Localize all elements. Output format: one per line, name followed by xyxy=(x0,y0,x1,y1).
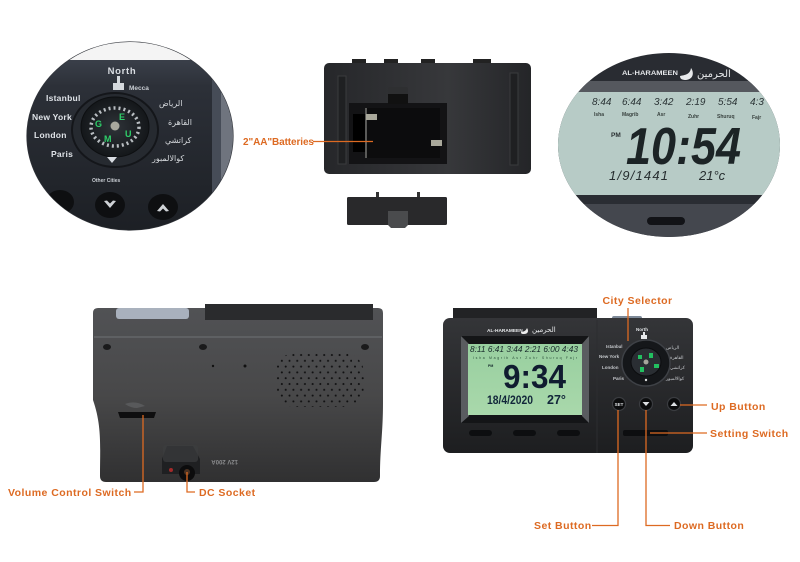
LCD screen xyxy=(550,92,790,195)
text: city labels: Other Cities xyxy=(92,178,121,184)
text: prayer times: 4:3 xyxy=(750,97,764,108)
text: prayer times: Shuruq xyxy=(717,114,734,120)
compass and city labels: Istanbul xyxy=(606,344,622,349)
speaker grille xyxy=(275,353,364,407)
battery recess xyxy=(349,87,447,164)
panel: LCD close-up circle xyxy=(558,53,780,237)
text: city labels: Istanbul xyxy=(46,93,81,103)
up button xyxy=(668,398,680,410)
text: prayer times: Asr xyxy=(657,112,665,118)
text: brand xyxy=(487,326,556,334)
LCD screen: 8:11 6:41 3:44 2:21 6:00 4:43 xyxy=(470,344,578,354)
text: prayer times xyxy=(592,97,764,121)
compass and city labels: Paris xyxy=(613,376,625,381)
text: city labels: New York xyxy=(32,112,72,122)
callout: volume control switch: Volume Control Switch xyxy=(8,487,132,499)
icon: down button xyxy=(95,192,125,218)
LCD screen: Isha Magrib Asr Zuhr Shuruq Fajr xyxy=(473,356,578,360)
LCD bezel xyxy=(461,336,589,423)
icon: compass dial: U xyxy=(125,129,132,139)
DC socket housing: 12V 200A xyxy=(211,458,238,464)
callout: setting switch: Setting Switch xyxy=(710,428,789,440)
icon: up button xyxy=(148,194,178,220)
callout: setting switch xyxy=(650,428,789,440)
text: prayer times: Magrib xyxy=(622,112,638,118)
volume control slot xyxy=(118,402,156,418)
compass and city labels: North xyxy=(636,327,648,332)
panel: clock front view xyxy=(443,295,789,532)
text: prayer times: 6:44 xyxy=(622,97,642,108)
compass and city labels: كوالالمبور xyxy=(665,376,685,381)
text: brand xyxy=(622,68,731,80)
text: main time: 9:34 xyxy=(503,358,567,395)
callout: batteries: 2"AA"Batteries xyxy=(243,137,314,148)
callout: down button: Down Button xyxy=(674,520,744,532)
icon: compass dial: M xyxy=(104,134,112,144)
compass and city labels: London xyxy=(602,365,619,370)
panel: clock rear view xyxy=(8,304,383,499)
text: city labels: كراتشي xyxy=(165,136,192,145)
LCD screen: 27° xyxy=(547,393,566,407)
text: prayer times: 8:44 xyxy=(592,97,612,108)
icon: compass dial xyxy=(72,93,158,167)
callout: city selector xyxy=(602,295,673,341)
text: prayer times: 5:54 xyxy=(718,97,738,108)
text: city labels xyxy=(32,66,192,184)
text: city labels: North xyxy=(108,66,136,77)
compass and city labels: New York xyxy=(599,354,620,359)
text: city labels: London xyxy=(34,130,67,140)
text: city labels: كوالالمبور xyxy=(151,154,184,163)
icon: set button partial xyxy=(50,190,74,212)
set button: SET xyxy=(615,402,624,407)
text: date: 1/9/1441 xyxy=(609,168,669,183)
panel: compass close-up circle xyxy=(26,41,234,231)
callout: set button xyxy=(534,410,618,532)
compass and city labels: كراتشي xyxy=(670,365,686,370)
LCD screen: PM xyxy=(611,132,621,139)
callout: DC socket xyxy=(187,472,256,499)
callout: DC socket: DC Socket xyxy=(199,487,256,499)
text: brand: الحرمين xyxy=(697,69,731,80)
compass and city labels: الرياض xyxy=(666,345,679,350)
setting switch slot xyxy=(623,430,668,436)
compass and city labels xyxy=(599,327,686,386)
set button xyxy=(612,398,626,410)
text: city labels: الرياض xyxy=(159,99,182,108)
text: city labels: القاهرة xyxy=(168,118,192,127)
icon: compass dial: E xyxy=(119,112,125,122)
text: main time: 10:54 xyxy=(626,118,741,176)
callout: set button: Set Button xyxy=(534,520,592,532)
clock back xyxy=(324,59,531,174)
down button xyxy=(640,398,652,410)
text: temperature: 21°c xyxy=(698,168,726,183)
DC socket housing xyxy=(162,445,238,481)
callout: volume control switch xyxy=(8,415,143,499)
callout: city selector: City Selector xyxy=(602,295,673,307)
text: brand: AL-HARAMEEN xyxy=(622,70,678,77)
LCD screen: PM xyxy=(488,364,493,368)
front soft buttons xyxy=(469,430,580,436)
callout: up button xyxy=(680,401,766,413)
battery cover xyxy=(347,192,447,228)
text: city labels: Paris xyxy=(51,149,73,159)
text: prayer times: Fajr xyxy=(752,115,761,121)
callout: batteries xyxy=(243,137,373,148)
text: city labels: Mecca xyxy=(129,85,149,92)
icon: compass dial: G xyxy=(95,119,102,129)
callout: down button xyxy=(646,410,744,532)
compass and city labels: القاهرة xyxy=(670,355,683,360)
text: prayer times: Isha xyxy=(594,112,604,118)
panel: battery compartment view xyxy=(243,59,531,228)
text: prayer times: Zuhr xyxy=(688,114,699,120)
text: brand: الحرمين xyxy=(532,326,556,334)
icon: slide switch xyxy=(647,217,685,225)
LCD screen xyxy=(468,344,582,415)
text: prayer times: 2:19 xyxy=(685,97,706,108)
callout: up button: Up Button xyxy=(711,401,766,413)
LCD screen: 18/4/2020 xyxy=(487,393,533,407)
text: brand: AL-HARAMEEN xyxy=(487,328,523,334)
text: prayer times: 3:42 xyxy=(654,97,674,108)
